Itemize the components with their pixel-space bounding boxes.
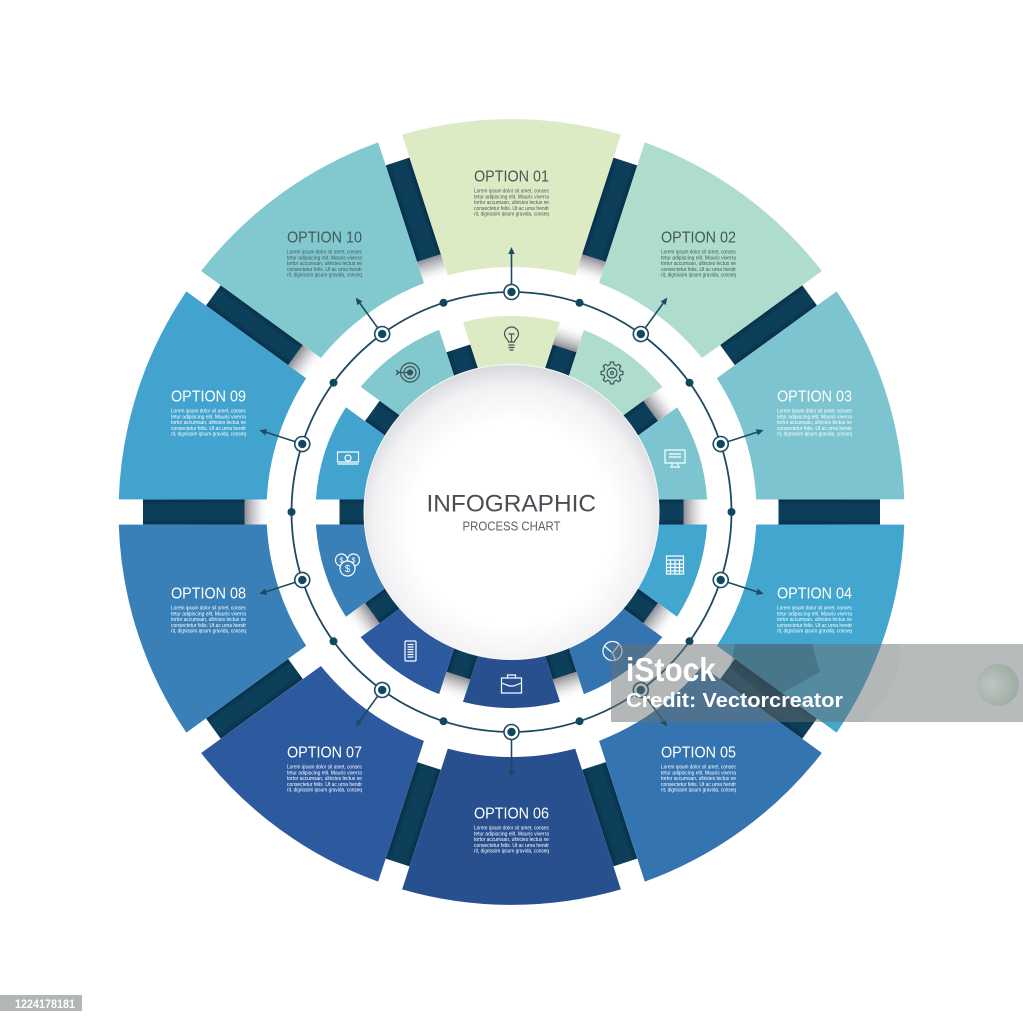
outer segment 05 <box>562 639 831 894</box>
text: option 03: rit, dignissim ipsum gravida, conseq <box>777 432 852 438</box>
text: option 07 <box>287 744 363 794</box>
outer segment 09 <box>104 287 320 543</box>
watermark dark facet <box>730 644 820 700</box>
text: option 08: OPTION 08 <box>171 586 246 602</box>
text: option 02: OPTION 02 <box>661 230 736 246</box>
text: option 08: consectetur felis. Ut ac urna hendr <box>171 623 246 629</box>
text: option 06: consectetur felis. Ut ac urna hendr <box>474 843 549 849</box>
text: option 01: rit, dignissim ipsum gravida, conseq <box>474 212 549 218</box>
text: option 10: tetur adipiscing elit. Mauris viverra <box>287 255 363 261</box>
text: option 06: OPTION 06 <box>474 806 549 822</box>
text: option 04: OPTION 04 <box>777 586 852 602</box>
text: option 03: tortor accumsan, ultricies lectus ne <box>777 420 852 426</box>
text: option 02: tetur adipiscing elit. Mauris viverra <box>661 255 737 261</box>
outer segment 08 <box>104 481 320 737</box>
image id tag <box>0 995 82 1011</box>
outer segment 10 <box>192 130 461 385</box>
icon: monitor <box>665 450 685 467</box>
outer segment 01 <box>402 119 621 275</box>
watermark panel <box>611 644 1023 722</box>
timeline ring <box>292 292 732 732</box>
text: option 08: rit, dignissim ipsum gravida, conseq <box>171 628 246 634</box>
inner segment 06 <box>463 648 560 708</box>
text: option 06 <box>474 806 550 854</box>
text: option 02: rit, dignissim ipsum gravida, conseq <box>661 272 736 278</box>
text: option 06: tortor accumsan, ultricies lectus ne <box>474 837 549 843</box>
text: option 07: OPTION 07 <box>287 744 362 762</box>
inner segment 03 <box>626 405 713 516</box>
text: option 10: OPTION 10 <box>287 230 362 246</box>
text: option 09: tortor accumsan, ultricies lectus ne <box>171 420 246 426</box>
text: option 06: Lorem ipsum dolor sit amet, consec <box>474 826 549 832</box>
text: option 04: rit, dignissim ipsum gravida, conseq <box>777 628 852 634</box>
inner dark connector strips <box>340 322 708 702</box>
text: option 03: OPTION 03 <box>777 388 852 406</box>
text: option 06: tetur adipiscing elit. Mauris viverra <box>474 831 550 837</box>
text: option 10: tortor accumsan, ultricies lectus ne <box>287 261 362 267</box>
text: option 09 <box>171 388 247 438</box>
text: option 01: tetur adipiscing elit. Mauris viverra <box>474 194 550 200</box>
icon: briefcase <box>502 675 522 693</box>
watermark circle <box>977 664 1019 706</box>
icon: banknote <box>338 452 358 464</box>
text: option 09: Lorem ipsum dolor sit amet, consec <box>171 408 246 414</box>
text: option 05: tortor accumsan, ultricies lectus ne <box>661 776 736 782</box>
outer segment 06 <box>402 749 621 905</box>
text: option 07: tortor accumsan, ultricies lectus ne <box>287 776 362 782</box>
text: option 05 <box>661 744 737 794</box>
watermark credit: Credit: Vectorcreator <box>626 690 843 712</box>
text: option 10 <box>287 230 363 278</box>
icon: light bulb <box>504 327 518 350</box>
text: option 09: tetur adipiscing elit. Mauris viverra <box>171 414 247 420</box>
text: option 07: tetur adipiscing elit. Mauris viverra <box>287 770 363 776</box>
text: option 10: rit, dignissim ipsum gravida, conseq <box>287 272 362 278</box>
text: option 05: Lorem ipsum dolor sit amet, consec <box>661 764 736 770</box>
inner segment 05 <box>552 594 666 699</box>
icon: coins <box>336 554 360 576</box>
text: option 06: rit, dignissim ipsum gravida, conseq <box>474 848 549 854</box>
text: option 02: tortor accumsan, ultricies lectus ne <box>661 261 736 267</box>
arrows and nodes <box>257 247 766 777</box>
text: option 04 <box>777 586 853 634</box>
text: option 09: OPTION 09 <box>171 388 246 406</box>
text: option 05: tetur adipiscing elit. Mauris viverra <box>661 770 737 776</box>
image id tag: 1224178181 <box>15 999 76 1011</box>
text: option 08: tetur adipiscing elit. Mauris viverra <box>171 611 247 617</box>
text: option 05: rit, dignissim ipsum gravida, conseq <box>661 788 736 794</box>
text: option 03: Lorem ipsum dolor sit amet, consec <box>777 408 852 414</box>
icon: target <box>396 363 420 382</box>
outer segment 02 <box>562 130 831 385</box>
icon: clock chart <box>603 642 622 660</box>
chart: circular process <box>104 119 919 905</box>
inner segment 01 <box>463 316 560 376</box>
text: option 01: tortor accumsan, ultricies lectus ne <box>474 200 549 206</box>
text: option 01: consectetur felis. Ut ac urna hendr <box>474 206 549 212</box>
text: option 08: tortor accumsan, ultricies lectus ne <box>171 617 246 623</box>
text: option 05: OPTION 05 <box>661 744 736 762</box>
icon: coin dollar signs: $ <box>345 564 351 575</box>
outer segment 03 <box>703 287 919 543</box>
outer segment 07 <box>192 639 461 894</box>
text: option 02: Lorem ipsum dolor sit amet, consec <box>661 250 736 256</box>
icon: coin dollar signs: $ <box>340 558 344 564</box>
inner segment 02 <box>552 325 666 430</box>
text: option 02: consectetur felis. Ut ac urna hendr <box>661 267 736 273</box>
text: option 09: consectetur felis. Ut ac urna hendr <box>171 426 246 432</box>
icon: gear <box>601 362 623 384</box>
icon: phone <box>405 641 416 661</box>
text: option 07: Lorem ipsum dolor sit amet, consec <box>287 764 362 770</box>
small ring dots <box>288 299 736 725</box>
text: option 04: consectetur felis. Ut ac urna hendr <box>777 623 852 629</box>
text: option 04: Lorem ipsum dolor sit amet, consec <box>777 606 852 612</box>
text: option 03: tetur adipiscing elit. Mauris viverra <box>777 414 853 420</box>
text: option 07: consectetur felis. Ut ac urna hendr <box>287 782 362 788</box>
inner segment 04 <box>626 508 713 619</box>
text: option 04: tortor accumsan, ultricies lectus ne <box>777 617 852 623</box>
inner segment 10 <box>357 325 471 430</box>
center disc <box>364 364 659 660</box>
center subtitle: PROCESS CHART <box>462 518 560 533</box>
inner segment 08 <box>310 508 397 619</box>
inner segment 07 <box>357 594 471 699</box>
text: option 04: tetur adipiscing elit. Mauris viverra <box>777 611 853 617</box>
icon: calendar <box>666 556 684 574</box>
text: option 08 <box>171 586 247 634</box>
text: option 10: Lorem ipsum dolor sit amet, consec <box>287 250 362 256</box>
text: option 01: Lorem ipsum dolor sit amet, consec <box>474 188 549 194</box>
text: option 01: OPTION 01 <box>474 168 549 186</box>
text: option 05: consectetur felis. Ut ac urna hendr <box>661 782 736 788</box>
icon: coin dollar signs <box>340 558 356 575</box>
text: option 07: rit, dignissim ipsum gravida, conseq <box>287 788 362 794</box>
watermark logo: iStock <box>626 651 717 688</box>
text: option 03 <box>777 388 853 438</box>
text: option 09: rit, dignissim ipsum gravida, conseq <box>171 432 246 438</box>
text: option 01 <box>474 168 550 218</box>
inner segment 09 <box>310 405 397 516</box>
text: option 02 <box>661 230 737 278</box>
center title: INFOGRAPHIC <box>426 491 596 518</box>
outer segment 04 <box>703 481 919 737</box>
icon: coin dollar signs: $ <box>352 558 356 564</box>
text: option 10: consectetur felis. Ut ac urna hendr <box>287 267 362 273</box>
watermark light facet <box>866 644 1023 722</box>
text: option 03: consectetur felis. Ut ac urna hendr <box>777 426 852 432</box>
outer dark connector strips <box>143 158 880 866</box>
text: option 08: Lorem ipsum dolor sit amet, consec <box>171 606 246 612</box>
